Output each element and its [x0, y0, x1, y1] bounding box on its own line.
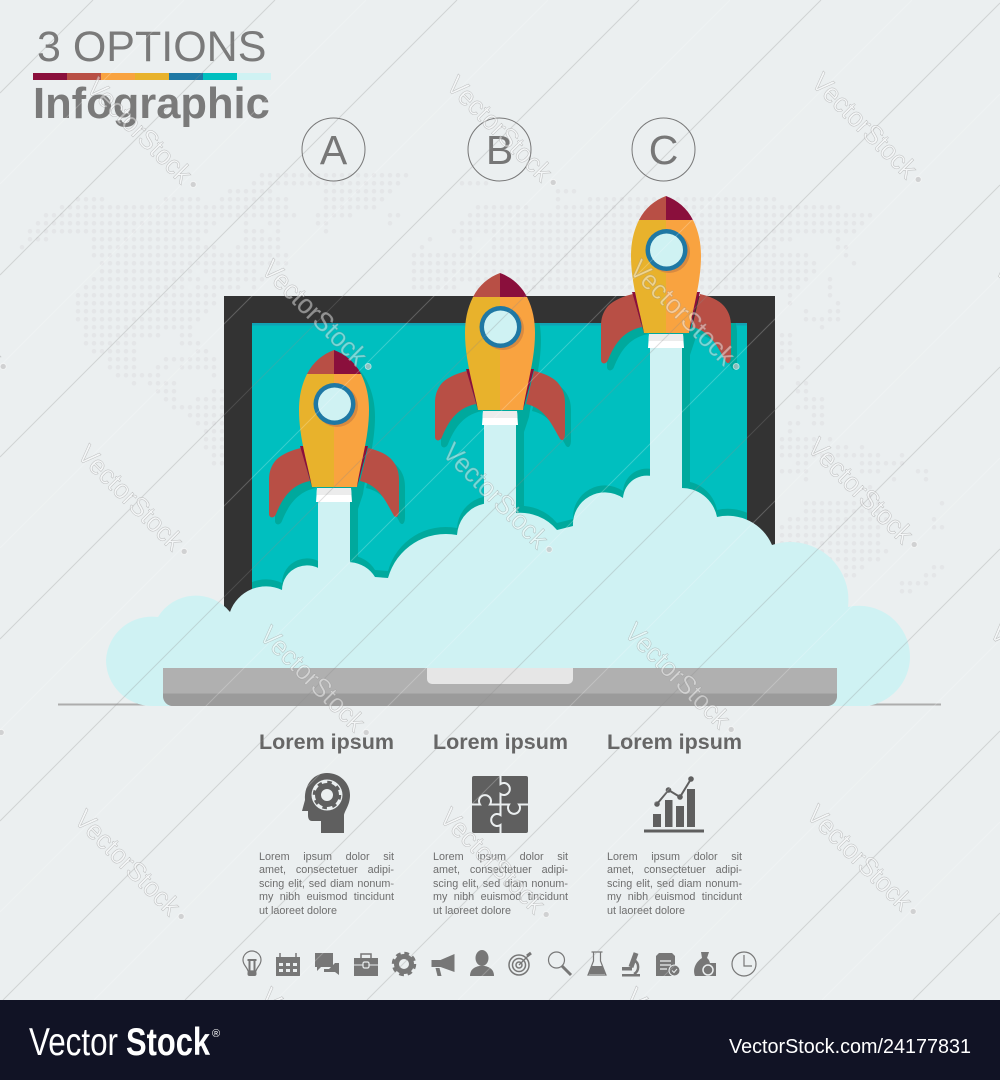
footer logo: Stock: [126, 1021, 210, 1064]
colour bar under title: [33, 73, 271, 80]
body text: column 3: scing elit, sed diam nonum-: [607, 878, 742, 890]
exhaust trail C: [650, 346, 682, 506]
heading: column 1: Lorem ipsum: [259, 730, 394, 754]
icon: microscope: [622, 952, 640, 976]
launch cloud: [106, 476, 910, 706]
icon: light bulb: [243, 951, 261, 976]
body text: column 1: my nibh euismod tincidunt: [259, 891, 394, 903]
body text: column 2: ut laoreet dolore: [433, 904, 511, 916]
body text: column 2: Lorem ipsum dolor sit: [433, 850, 568, 862]
footer logo: Vector: [29, 1021, 118, 1064]
icon: clock: [732, 952, 756, 976]
body text: column 1: amet, consectetuer adipi-: [259, 864, 394, 876]
icon row: [243, 950, 756, 976]
icon: target: [509, 953, 531, 975]
body text: column 1: ut laoreet dolore: [259, 904, 337, 916]
footer bar: [0, 1000, 1000, 1080]
rocket A: [269, 350, 399, 517]
footer image id: VectorStock.com/24177831: [729, 1036, 971, 1058]
footer logo: [29, 1021, 220, 1064]
icon: bar chart with trend line: [644, 776, 704, 832]
body text: column 1: Lorem ipsum dolor sit: [259, 850, 394, 862]
icon: money bag: [694, 952, 716, 976]
world map dots: [18, 171, 946, 595]
icon: briefcase: [354, 954, 378, 976]
icon: magnifier: [548, 952, 571, 975]
shadows on the screen: [252, 323, 747, 590]
body text: column 2: [433, 850, 568, 916]
body text: column 1: [259, 850, 394, 916]
option marker A: A: [320, 127, 348, 173]
body text: column 3: [607, 850, 742, 916]
icon: document with check: [656, 953, 680, 976]
laptop base: [163, 668, 837, 706]
laptop screen: [252, 323, 747, 623]
icon: gear: [394, 954, 414, 974]
body text: column 2: scing elit, sed diam nonum-: [433, 878, 568, 890]
body text: column 3: my nibh euismod tincidunt: [607, 891, 742, 903]
body text: column 2: amet, consectetuer adipi-: [433, 864, 568, 876]
icon: person: [470, 950, 494, 976]
title: 3 OPTIONS: 3 OPTIONS: [37, 23, 266, 71]
ground line left: [58, 704, 158, 706]
body text: column 3: ut laoreet dolore: [607, 904, 685, 916]
footer logo: ®: [212, 1028, 220, 1040]
icon: head with gear: [302, 773, 350, 833]
option marker A: [302, 118, 365, 181]
body text: column 1: scing elit, sed diam nonum-: [259, 878, 394, 890]
option marker C: C: [649, 127, 678, 173]
subtitle: Infographic: Infographic: [33, 80, 270, 128]
body text: column 2: my nibh euismod tincidunt: [433, 891, 568, 903]
icon: calendar: [276, 953, 300, 976]
rocket B: [435, 273, 565, 440]
option marker B: [468, 118, 531, 181]
body text: column 3: Lorem ipsum dolor sit: [607, 850, 742, 862]
heading: column 2: Lorem ipsum: [433, 730, 568, 754]
rocket C: [601, 196, 731, 363]
option marker C: [632, 118, 695, 181]
body text: column 3: amet, consectetuer adipi-: [607, 864, 742, 876]
icon: puzzle: [472, 776, 528, 833]
option marker B: B: [486, 127, 513, 173]
heading: column 3: Lorem ipsum: [607, 730, 742, 754]
icon: megaphone: [432, 954, 454, 976]
laptop screen frame: [224, 296, 775, 626]
icon: chat bubbles: [315, 953, 339, 975]
exhaust trail B: [484, 423, 516, 583]
icon: flask: [588, 952, 606, 975]
ground line right: [850, 704, 941, 706]
exhaust trail A: [318, 500, 350, 660]
